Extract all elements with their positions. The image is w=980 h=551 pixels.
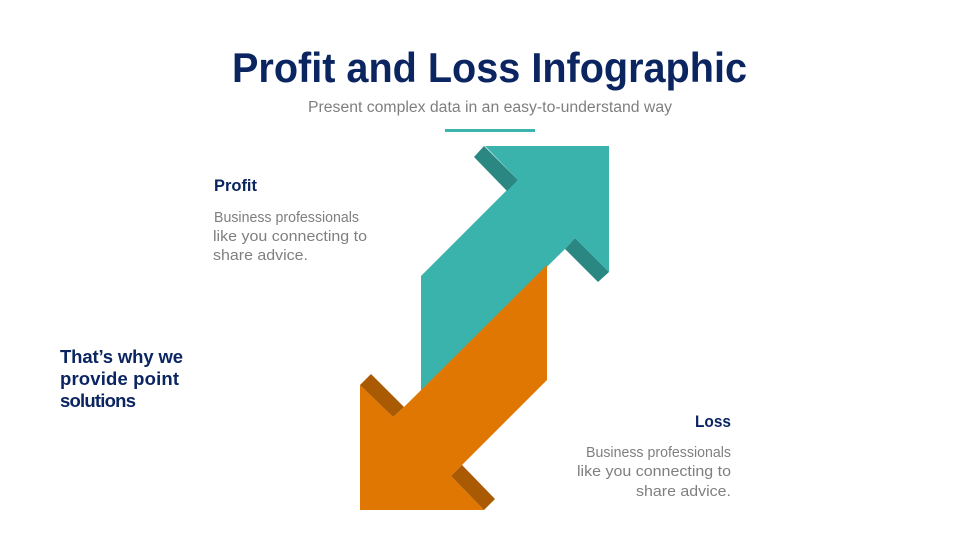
subtitle: Present complex data in an easy-to-understand way xyxy=(308,99,672,116)
icon: teal profit arrow pointing up-right xyxy=(421,146,609,391)
loss description xyxy=(577,445,731,500)
side statement xyxy=(60,346,183,411)
profit heading: Profit xyxy=(214,176,257,195)
profit description: like you connecting to xyxy=(213,229,367,245)
loss heading: Loss xyxy=(695,412,731,431)
profit text block xyxy=(213,176,367,264)
loss description: share advice. xyxy=(636,484,731,500)
side statement: provide point xyxy=(60,368,179,389)
side statement: solutions xyxy=(60,390,136,411)
profit description: share advice. xyxy=(213,248,308,264)
loss description: like you connecting to xyxy=(577,464,731,480)
profit description xyxy=(213,210,367,264)
loss description: Business professionals xyxy=(586,445,731,461)
title: Profit and Loss Infographic xyxy=(232,44,747,91)
loss text block xyxy=(577,412,731,500)
title accent line xyxy=(445,129,535,132)
side statement: That’s why we xyxy=(60,346,183,367)
icon: orange loss arrow pointing down-left xyxy=(360,265,547,510)
profit description: Business professionals xyxy=(214,210,359,226)
